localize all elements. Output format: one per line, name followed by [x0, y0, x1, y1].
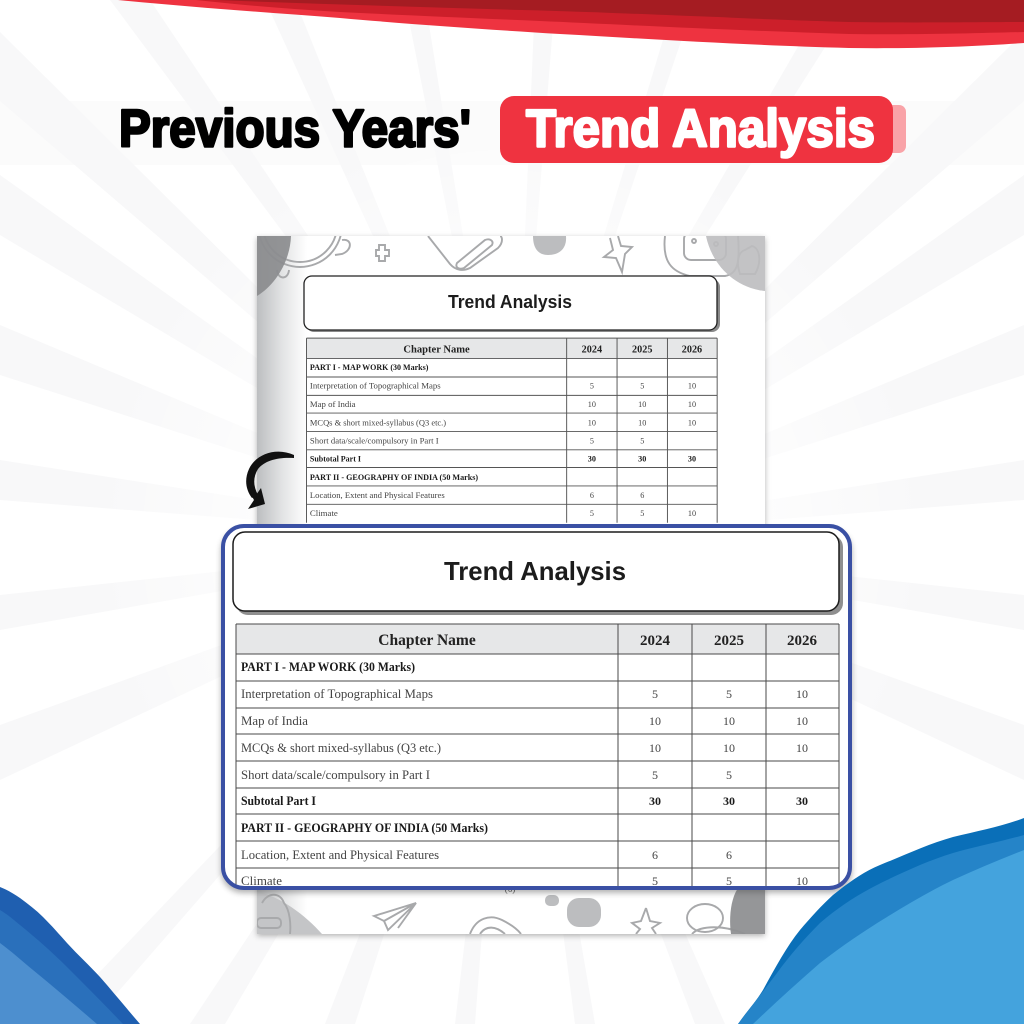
small table: 10 — [638, 400, 646, 409]
small table: 10 — [688, 400, 696, 409]
zoomed table: 30 — [796, 794, 808, 808]
small table: 30 — [588, 454, 596, 463]
small table: MCQs & short mixed-syllabus (Q3 etc.) — [310, 417, 446, 427]
top red swoosh — [118, 0, 1024, 48]
small table: 2026 — [682, 344, 702, 355]
small table: 5 — [590, 437, 594, 446]
zoomed table: 2026 — [787, 633, 818, 649]
small table: 5 — [640, 509, 644, 518]
small table: 10 — [688, 418, 696, 427]
zoomed table: 10 — [723, 741, 735, 755]
zoomed table: 10 — [796, 687, 808, 701]
small table: Location, Extent and Physical Features — [310, 490, 445, 500]
title pill tab — [880, 105, 906, 153]
small table: Short data/scale/compulsory in Part I — [310, 436, 439, 446]
title — [119, 96, 906, 163]
small table: Subtotal Part I — [310, 453, 362, 463]
zoomed table: 5 — [652, 687, 658, 701]
small table: 2024 — [582, 344, 602, 355]
small table: 6 — [590, 491, 594, 500]
title: previous years: Previous Years' — [119, 100, 471, 158]
zoomed table: Chapter Name — [378, 632, 476, 649]
bottom right blue wave — [738, 818, 1024, 1024]
zoomed table: 5 — [726, 768, 732, 782]
zoomed table: PART II - GEOGRAPHY OF INDIA (50 Marks) — [241, 821, 488, 835]
zoomed table — [236, 624, 839, 895]
zoomed table: MCQs & short mixed-syllabus (Q3 etc.) — [241, 741, 441, 755]
zoomed table: 10 — [796, 874, 808, 888]
small table: 6 — [640, 491, 644, 500]
small table: Interpretation of Topographical Maps — [310, 381, 441, 391]
zoomed table: Subtotal Part I — [241, 794, 316, 808]
small table: 5 — [590, 509, 594, 518]
zoomed table: Short data/scale/compulsory in Part I — [241, 768, 430, 782]
zoomed table: Location, Extent and Physical Features — [241, 848, 439, 862]
small table: 5 — [640, 437, 644, 446]
zoomed table: 5 — [726, 874, 732, 888]
corner shape bottom right — [730, 888, 765, 934]
zoomed table: Interpretation of Topographical Maps — [241, 687, 433, 701]
zoomed table: 10 — [649, 741, 661, 755]
zoomed table: 10 — [649, 714, 661, 728]
blobs bottom — [545, 895, 559, 906]
small heading: Trend Analysis — [448, 292, 572, 312]
small table: 5 — [640, 382, 644, 391]
zoomed table: Map of India — [241, 714, 308, 728]
arrow — [246, 452, 294, 509]
small table: 10 — [688, 509, 696, 518]
small table: PART I - MAP WORK (30 Marks) — [310, 362, 429, 372]
small table: Chapter Name — [403, 344, 470, 355]
zoomed table: 2025 — [714, 633, 744, 649]
title pill — [500, 96, 893, 163]
zoomed heading box — [233, 532, 843, 615]
small table: 30 — [688, 454, 696, 463]
corner shapes — [257, 236, 291, 296]
doodles bottom — [257, 895, 745, 934]
zoomed table: 5 — [652, 874, 658, 888]
blob top — [533, 236, 566, 255]
zoomed table: 10 — [796, 714, 808, 728]
small table — [307, 338, 717, 523]
small table: 2025 — [632, 344, 652, 355]
small table: Climate — [310, 508, 338, 518]
zoomed table: PART I - MAP WORK (30 Marks) — [241, 660, 415, 674]
small table: 10 — [638, 418, 646, 427]
title: trend analysis: Trend Analysis — [526, 100, 875, 158]
zoomed table: 5 — [726, 687, 732, 701]
small heading box — [304, 276, 720, 332]
bottom left blue wave — [0, 887, 140, 1024]
small table: 10 — [588, 400, 596, 409]
zoomed table: 30 — [649, 794, 661, 808]
table header row — [236, 624, 839, 654]
small table: Map of India — [310, 399, 356, 409]
zoomed heading: Trend Analysis — [444, 556, 626, 586]
small table: 10 — [588, 418, 596, 427]
zoomed table: 2024 — [640, 633, 670, 649]
zoomed table: 10 — [796, 741, 808, 755]
book page preview — [257, 183, 765, 936]
doodles top — [278, 236, 738, 278]
small table: PART II - GEOGRAPHY OF INDIA (50 Marks) — [310, 472, 478, 482]
zoomed callout panel — [221, 526, 852, 895]
zoomed table: Climate — [241, 874, 282, 888]
small table: 30 — [638, 454, 646, 463]
small table: 5 — [590, 382, 594, 391]
zoomed table: 5 — [652, 768, 658, 782]
small table: 10 — [688, 382, 696, 391]
zoomed table: 6 — [652, 848, 658, 862]
zoomed table: 10 — [723, 714, 735, 728]
zoomed table: 6 — [726, 848, 732, 862]
zoomed table: 30 — [723, 794, 735, 808]
page number: (6) — [505, 884, 515, 894]
